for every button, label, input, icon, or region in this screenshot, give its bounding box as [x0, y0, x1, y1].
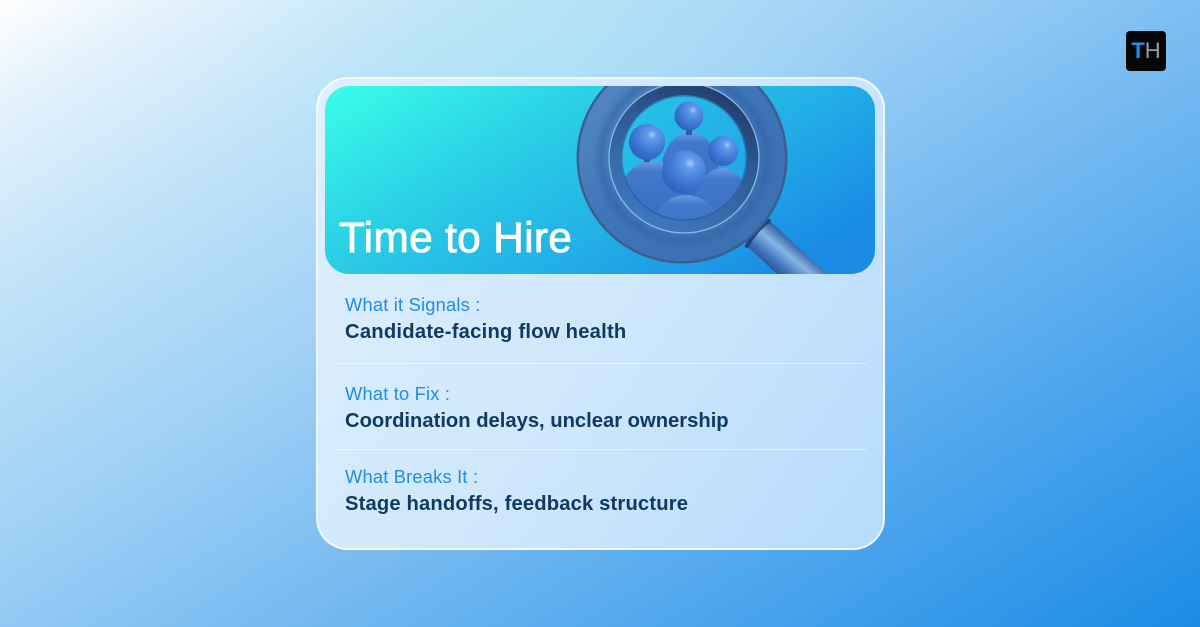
panel: card: [316, 77, 885, 550]
icon: magnifying glass over people: [576, 86, 827, 274]
text block: what to fix: [345, 383, 729, 432]
value: Stage handoffs, feedback structure: [345, 493, 688, 515]
logo: TH: [1126, 31, 1166, 71]
panel: hero banner with magnifier illustration: [325, 86, 875, 274]
logo: TH: TH: [1131, 38, 1161, 63]
magnifier ring: [576, 52, 788, 264]
title: Time to Hire: [339, 215, 572, 262]
label: What it Signals :: [345, 294, 480, 315]
text block: what breaks it: [345, 466, 688, 515]
magnifier handle: [747, 221, 828, 298]
label: What Breaks It :: [345, 466, 478, 487]
label: What to Fix :: [345, 383, 450, 404]
text block: what it signals: [345, 294, 627, 343]
people inside lens: [621, 95, 747, 221]
value: Candidate-facing flow health: [345, 321, 627, 343]
value: Coordination delays, unclear ownership: [345, 410, 729, 432]
